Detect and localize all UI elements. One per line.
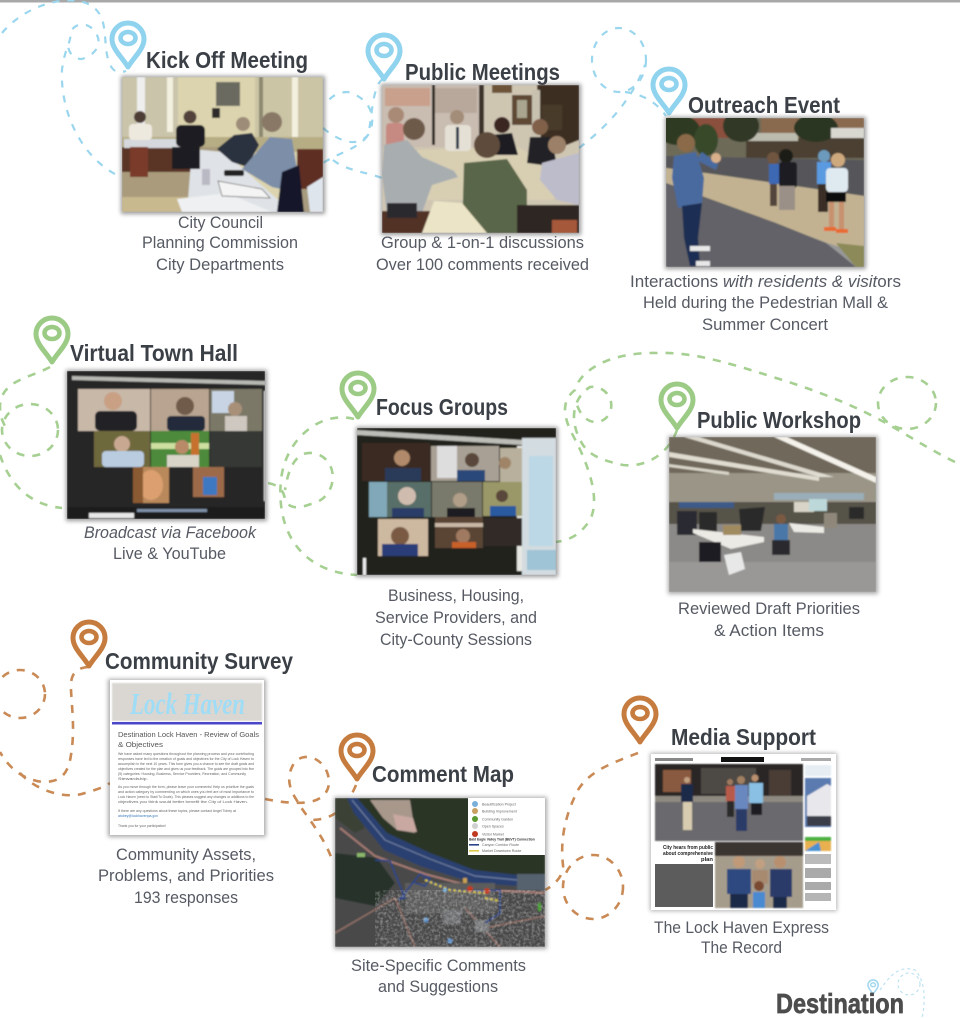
map legend: Visitor Market [482, 832, 504, 836]
caption: Problems, and Priorities [98, 866, 274, 885]
panel: Focus Groups [342, 373, 558, 649]
caption [630, 272, 901, 334]
survey form screenshot: We have asked many questions throughout the planning process and your contributing [118, 752, 254, 756]
panel: Comment Map [334, 735, 547, 996]
dashed route: blue [2, 0, 666, 178]
icon: green pin [661, 384, 693, 428]
icon: blue pin [112, 23, 144, 67]
heading: Kick Off Meeting [146, 47, 308, 73]
caption [678, 599, 860, 640]
panel: Virtual Town Hall [36, 318, 267, 563]
photo: group discussion [381, 84, 581, 235]
survey form screenshot: atobey@lockhavenpa.gov [118, 814, 158, 818]
caption: City Council [178, 213, 263, 232]
article headline: about comprehensive [663, 851, 713, 857]
panel: Outreach Event [630, 69, 901, 334]
caption: Summer Concert [702, 315, 828, 334]
survey form screenshot: If there are any questions about these topics, please contact Angel Tobey at [118, 809, 236, 813]
survey form screenshot: accomplish in the next 10 years. This form gives you a chance to see the draft goals and [118, 762, 254, 766]
caption: and Suggestions [378, 977, 498, 996]
map legend: Beautification Project [482, 802, 516, 806]
photo: council meeting [121, 76, 325, 214]
newspaper clipping [650, 753, 837, 911]
caption: Broadcast via Facebook [84, 523, 257, 542]
photo: focus group video call [356, 427, 558, 577]
caption: Over 100 comments received [376, 255, 589, 274]
survey form screenshot: objectives created for the plan and gives us your feedback. The goals are grouped into five [118, 767, 254, 771]
logo: Destination [776, 969, 924, 1018]
photo: workshop hall [668, 436, 878, 594]
logo dashed loop [898, 973, 920, 995]
heading: Public Workshop [697, 407, 861, 433]
heading: Virtual Town Hall [70, 340, 238, 366]
article headline: City hears from public [663, 845, 713, 851]
caption [376, 233, 589, 274]
panel: Public Workshop [661, 384, 878, 640]
survey form screenshot: As you move through the form, please leave your comments! Help us prioritize the goals [118, 785, 254, 789]
map legend: Canyon Corridor Route [482, 843, 519, 847]
article headline: plan [701, 857, 714, 863]
survey form screenshot: responses have led to the creation of goals and objectives for the City of Lock Haven to [118, 757, 254, 761]
heading: Comment Map [372, 761, 514, 787]
icon: orange pin [624, 698, 656, 742]
heading: Community Survey [105, 648, 293, 674]
caption [351, 956, 526, 996]
icon: orange pin [341, 735, 373, 779]
caption: Site-Specific Comments [351, 956, 526, 975]
map legend: Market Downtown Route [482, 849, 521, 853]
map screenshot [334, 797, 547, 949]
survey form screenshot: Destination Lock Haven - Review of Goals [118, 730, 259, 739]
top edge bar [0, 0, 960, 2]
map legend: Building Improvement [482, 810, 517, 814]
panel: Community Survey [73, 622, 293, 907]
map legend: Community Garden [482, 818, 513, 822]
heading: Focus Groups [376, 394, 508, 420]
survey form screenshot: (5) categories: Housing, Business, Service Providers, Recreation, and Community [118, 772, 246, 776]
caption: City Departments [156, 255, 284, 274]
logo pin [868, 980, 878, 994]
caption: Group & 1-on-1 discussions [381, 233, 584, 252]
panel: Media Support [624, 698, 837, 957]
survey form screenshot: & Objectives [118, 740, 163, 749]
caption: City-County Sessions [380, 630, 532, 649]
survey form screenshot: objectives you think would better benefit the City of Lock Haven. [118, 800, 248, 804]
photo: video call on screen [66, 370, 267, 521]
caption [84, 523, 257, 563]
panel: Public Meetings [368, 35, 589, 274]
caption: & Action Items [714, 621, 824, 640]
caption: Service Providers, and [375, 608, 537, 627]
caption: Community Assets, [116, 845, 256, 864]
dashed route: orange [0, 667, 638, 919]
caption: Interactions with residents & visitors [630, 272, 901, 291]
map legend [468, 798, 545, 855]
caption: Reviewed Draft Priorities [678, 599, 860, 618]
dashed route: green [0, 353, 955, 575]
caption: The Record [701, 938, 782, 957]
caption: Held during the Pedestrian Mall & [643, 293, 889, 312]
caption: 193 responses [134, 888, 238, 907]
survey form screenshot [108, 679, 266, 837]
logo dashed route [880, 969, 924, 1018]
article headline [663, 845, 714, 863]
caption: The Lock Haven Express [654, 918, 829, 937]
survey form screenshot: Stewardship. [118, 777, 148, 781]
photo: street outreach [656, 110, 866, 269]
caption [375, 586, 537, 649]
icon: blue pin [368, 35, 400, 79]
caption [142, 213, 298, 274]
caption: Planning Commission [142, 233, 298, 252]
icon: green pin [36, 318, 68, 362]
map legend: Bald Eagle Valley Trail (BEVT) Connection [469, 838, 535, 842]
survey form screenshot: Lock Haven (need to Start/To Goals). This pleases suggest any changes or additions to the [118, 795, 254, 799]
panel: Kick Off Meeting [112, 23, 325, 274]
map legend: Open Spaces [482, 824, 504, 828]
heading: Media Support [671, 724, 816, 750]
survey form screenshot: and action category by commenting on which ones you feel are of most importance to [118, 790, 254, 794]
caption [654, 918, 829, 957]
caption: Business, Housing, [388, 586, 524, 605]
heading: Public Meetings [405, 59, 560, 85]
icon: orange pin [73, 622, 105, 666]
caption: Live & YouTube [113, 544, 226, 563]
survey form screenshot: Thank you for your participation! [118, 824, 166, 828]
icon: blue pin [653, 69, 685, 113]
caption [98, 845, 274, 907]
heading: Outreach Event [688, 92, 840, 118]
icon: green pin [342, 373, 374, 417]
